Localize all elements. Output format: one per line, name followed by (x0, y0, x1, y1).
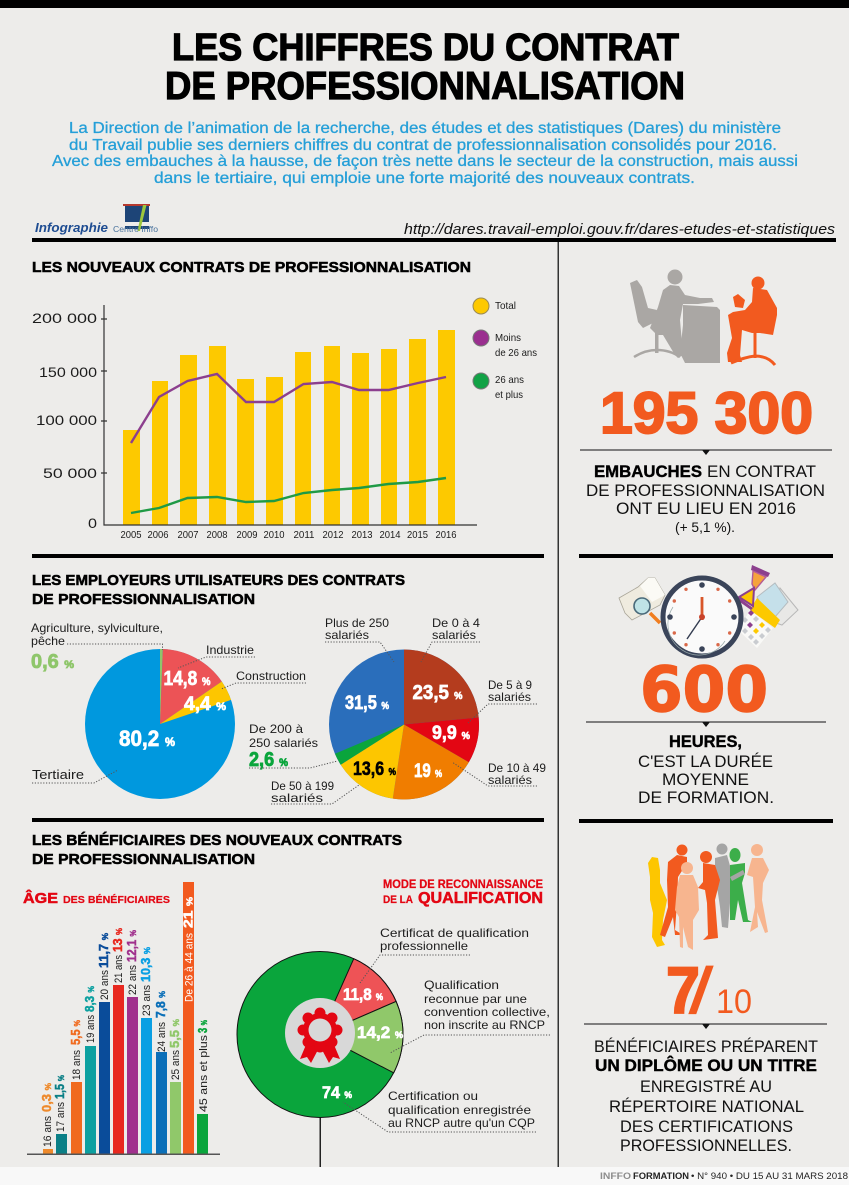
rotated labels: 21 ans (113, 955, 125, 983)
x axis labels: 2007 (178, 529, 199, 541)
donut chart: qualification: 11,8 % (343, 985, 383, 1004)
intro text: du Travail publie ses derniers chiffres du contrat de professionnalisation consolidés pour 2016. (69, 137, 777, 154)
caption: C'EST LA DURÉE (638, 752, 773, 771)
pie chart: taille d'entreprise: 9,9 % (432, 723, 470, 744)
caption: ONT EU LIEU EN 2016 (616, 500, 796, 518)
footer: INFFO (600, 1171, 631, 1182)
labels: taille d'entreprise: 250 salariés (249, 736, 318, 750)
rotated labels: 17 ans (55, 1102, 67, 1132)
caption: PROFESSIONNELLES. (620, 1137, 792, 1155)
panel: bénéficiaires (23, 832, 550, 1167)
caption (594, 1037, 818, 1155)
heading: LES EMPLOYEURS UTILISATEURS DES CONTRATS (32, 572, 405, 589)
rotated labels: 5,5 % (168, 1019, 182, 1048)
caption: BÉNÉFICIAIRES PRÉPARENT (594, 1037, 818, 1056)
y axis labels (32, 310, 97, 531)
x axis labels: 2010 (264, 529, 285, 541)
labels: qualification: Qualification (424, 978, 499, 992)
x axis labels: 2016 (436, 529, 457, 541)
pie chart: taille d'entreprise: 13,6 % (353, 759, 396, 780)
labels: qualification (343, 926, 550, 1132)
labels: secteurs: 0,6 % (31, 651, 74, 673)
rotated labels: 25 ans (170, 1050, 182, 1080)
rotated labels: 16 ans (42, 1116, 54, 1147)
caption (586, 463, 825, 535)
labels: taille d'entreprise: De 5 à 9 (488, 678, 532, 692)
rotated labels: 3 % (196, 1020, 210, 1033)
panel: bénéficiaires préparent (584, 844, 827, 1155)
heading (32, 572, 405, 608)
donut chart: qualification: 14,2 % (357, 1023, 403, 1042)
footer (600, 1171, 848, 1182)
y axis labels: 100 000 (36, 412, 97, 428)
line: 26 ans et plus (131, 478, 446, 513)
labels: taille d'entreprise: De 200 à (249, 722, 303, 736)
y axis labels: 50 000 (43, 465, 97, 481)
subheading: mode de reconnaissance: QUALIFICATION (418, 890, 543, 907)
labels: taille d'entreprise: salariés (325, 628, 369, 642)
rotated labels: 1,5 % (53, 1075, 67, 1099)
intro text: dans le tertiaire, qui emploie une forte majorité des nouveaux contrats. (154, 170, 695, 187)
rotated labels: 45 ans et plus (198, 1034, 210, 1112)
y axis labels: 0 (88, 515, 97, 531)
icon: hourglass (737, 565, 770, 610)
labels: taille d'entreprise: salariés (488, 773, 532, 787)
labels: taille d'entreprise: De 50 à 199 (271, 779, 334, 793)
caption: DE PROFESSIONNALISATION (586, 482, 825, 500)
pie chart: secteurs (85, 649, 235, 799)
caption: ENREGISTRÉ AU (640, 1077, 772, 1096)
legend: Moins (495, 332, 521, 344)
labels: secteurs: Tertiaire (32, 767, 84, 782)
caption: EN CONTRAT (707, 463, 816, 481)
credit: Infographie Centre Inffo logo (35, 204, 159, 235)
intro text (52, 120, 798, 187)
title (165, 27, 685, 108)
rotated labels: 18 ans (71, 1050, 83, 1080)
labels: qualification: qualification enregistrée (388, 1103, 531, 1117)
rotated labels: 10,3 % (139, 947, 153, 982)
pie chart: secteurs: 4,4 % (184, 694, 226, 715)
divider arrow (584, 1024, 827, 1029)
heading: LES NOUVEAUX CONTRATS DE PROFESSIONNALISATION (32, 259, 471, 276)
labels: taille d'entreprise: De 10 à 49 (488, 761, 546, 775)
legend: Total (495, 300, 516, 312)
x axis labels: 2005 (120, 529, 142, 541)
labels: taille d'entreprise (249, 616, 546, 805)
legend: et plus (495, 389, 523, 401)
icon: office workers (630, 270, 777, 365)
panel: employeurs (31, 572, 546, 805)
labels: qualification: reconnue par une (424, 992, 527, 1006)
labels: qualification: professionnelle (380, 939, 468, 953)
rotated labels: 19 ans (85, 1015, 97, 1043)
panel: heures de formation (586, 565, 826, 807)
rotated labels: De 26 à 44 ans (184, 933, 196, 1002)
labels: taille d'entreprise: Plus de 250 (325, 616, 389, 630)
labels: secteurs: Agriculture, sylviculture, (31, 621, 163, 635)
labels: secteurs: pêche (31, 634, 65, 648)
labels: qualification: non inscrite au RNCP (424, 1018, 545, 1032)
x axis labels: 2013 (352, 529, 373, 541)
icon: rosette (298, 1008, 342, 1063)
x axis labels: 2011 (294, 529, 315, 541)
caption: HEURES, (669, 733, 742, 751)
labels: taille d'entreprise: salariés (271, 791, 323, 805)
panel: nouveaux contrats (32, 259, 537, 541)
caption (638, 733, 774, 807)
labels: qualification: Certification ou (388, 1089, 478, 1103)
y axis labels: 150 000 (39, 364, 97, 380)
rotated labels: 21 % (182, 897, 196, 928)
labels: secteurs: Industrie (206, 643, 254, 657)
pie chart: taille d'entreprise: 31,5 % (345, 693, 389, 714)
pie chart: secteurs: 80,2 % (119, 726, 175, 751)
x axis labels: 2009 (236, 529, 258, 541)
subheading: âge (23, 889, 170, 907)
title: LES CHIFFRES DU CONTRAT (172, 27, 679, 69)
y axis labels: 200 000 (32, 310, 97, 326)
x axis labels: 2008 (206, 529, 228, 541)
caption: DES CERTIFICATIONS (620, 1118, 793, 1136)
credit: Infographie Centre Inffo logo: Infographie (35, 220, 108, 235)
big number: 10 (716, 983, 752, 1021)
divider arrow (586, 722, 826, 727)
subheading: mode de reconnaissance: DE LA (383, 894, 413, 906)
labels: taille d'entreprise: salariés (488, 690, 531, 704)
divider arrow (580, 450, 832, 455)
line: moins de 26 ans (131, 374, 446, 443)
heading: DE PROFESSIONNALISATION (32, 591, 255, 608)
donut chart: qualification: 74 % (322, 1083, 352, 1102)
source url: http://dares.travail-emploi.gouv.fr/dares-etudes-et-statistiques (404, 221, 836, 238)
labels: qualification: convention collective, (424, 1005, 550, 1019)
rotated labels: 20 ans (99, 970, 111, 1000)
x axis labels: 2012 (322, 529, 344, 541)
subheading: mode de reconnaissance: MODE DE RECONNAISSANCE (383, 879, 543, 891)
labels: taille d'entreprise: salariés (432, 628, 476, 642)
rotated labels: 23 ans (141, 985, 153, 1016)
icon: group of people (648, 844, 769, 950)
legend: 26 ans (495, 374, 524, 386)
caption: UN DIPLÔME OU UN TITRE (595, 1056, 817, 1075)
caption: DE FORMATION. (638, 789, 774, 807)
rotated labels: 11,7 % (97, 933, 111, 968)
pie chart: taille d'entreprise (329, 650, 479, 800)
x axis labels (120, 529, 457, 541)
labels: taille d'entreprise: De 0 à 4 (432, 616, 480, 630)
rotated labels: 24 ans (156, 1022, 168, 1052)
icon: magnifying glass (634, 598, 660, 623)
subheading: âge: ÂGE (23, 889, 58, 907)
caption: (+ 5,1 %). (675, 519, 735, 535)
footer: • N° 940 • DU 15 AU 31 MARS 2018 (691, 1171, 848, 1182)
rotated labels: 13 % (111, 928, 125, 952)
intro text: La Direction de l’animation de la recherche, des études et des statistiques (Dares) du ministère (69, 120, 781, 137)
icon: documents and calendar (619, 578, 798, 648)
rotated labels: 5,5 % (69, 1020, 83, 1045)
x axis labels: 2006 (148, 529, 169, 541)
title: DE PROFESSIONNALISATION (165, 65, 685, 108)
labels: qualification: Certificat de qualification (380, 926, 529, 940)
panel: embauches (580, 270, 832, 535)
x axis labels: 2015 (407, 529, 428, 541)
pie chart: taille d'entreprise: 19 % (414, 761, 442, 782)
rotated labels: 12,1 % (125, 930, 139, 962)
rotated labels: 22 ans (127, 965, 139, 995)
labels: secteurs: Construction (236, 669, 306, 683)
subheading: âge: DES BÉNÉFICIAIRES (63, 893, 170, 906)
big number: 195 300 (600, 381, 813, 446)
rotated labels: 0,3 % (40, 1083, 54, 1112)
heading: LES BÉNÉFICIAIRES DES NOUVEAUX CONTRATS (32, 832, 402, 849)
rotated labels (40, 897, 210, 1147)
big number: 7 (666, 953, 700, 1027)
big number (666, 953, 752, 1027)
subheading: mode de reconnaissance (383, 879, 543, 907)
legend (473, 298, 537, 401)
legend: de 26 ans (495, 347, 537, 359)
rotated labels: 7,8 % (154, 991, 168, 1018)
caption: EMBAUCHES (594, 463, 702, 481)
rotated labels: 8,3 % (83, 986, 97, 1012)
donut chart: qualification (237, 952, 403, 1167)
footer: FORMATION (633, 1171, 689, 1182)
big number: 600 (640, 653, 768, 726)
bar chart: âge (27, 882, 220, 1155)
credit: Infographie Centre Inffo logo: Centre Inffo (113, 225, 159, 234)
caption: RÉPERTOIRE NATIONAL (609, 1097, 804, 1116)
bar chart: total (123, 330, 455, 525)
labels: taille d'entreprise: 2,6 % (249, 749, 288, 771)
pie chart: secteurs: 14,8 % (164, 668, 211, 690)
pie chart: taille d'entreprise: 23,5 % (412, 682, 463, 704)
caption: MOYENNE (662, 771, 749, 789)
icon: clock (663, 578, 741, 656)
intro text: Avec des embauches à la hausse, de façon très nette dans le secteur de la construction, mais aussi (52, 153, 798, 170)
labels: secteurs (31, 621, 306, 783)
x axis labels: 2014 (380, 529, 401, 541)
big number: / (689, 954, 714, 1027)
labels: qualification: au RNCP autre qu'un CQP (388, 1116, 535, 1130)
heading (32, 832, 402, 868)
axes (101, 305, 477, 525)
heading: DE PROFESSIONNALISATION (32, 851, 255, 868)
